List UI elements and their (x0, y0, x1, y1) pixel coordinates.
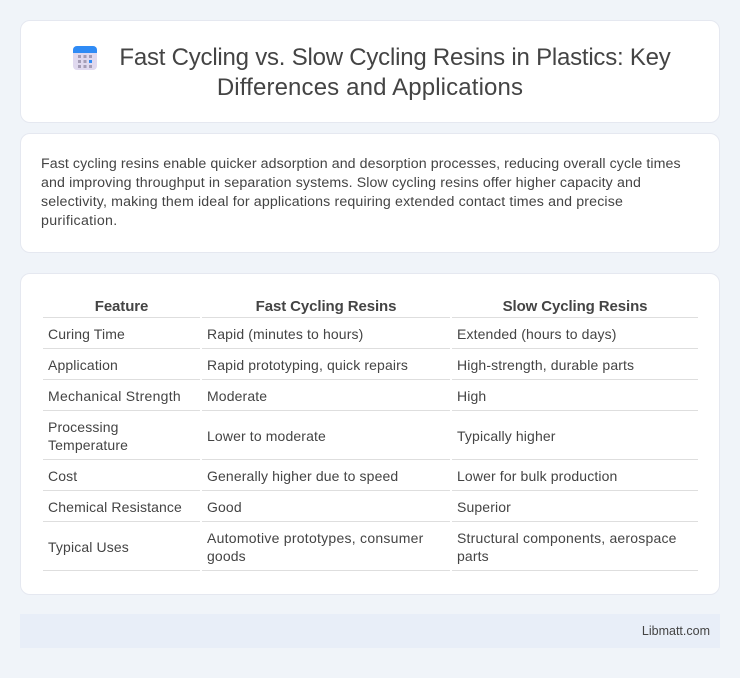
row: application: Rapid prototyping, quick repairs (207, 357, 408, 373)
row: curing time: Extended (hours to days) (457, 326, 617, 342)
table (43, 298, 698, 571)
row: chemical resistance: Good (207, 499, 242, 515)
title: Fast Cycling vs. Slow Cycling Resins in Plastics: Key (119, 44, 671, 71)
title (119, 44, 671, 101)
row: chemical resistance: Chemical Resistance (48, 499, 182, 515)
row: typical uses: goods (207, 548, 246, 564)
footer bar (20, 614, 720, 648)
row: cost: Cost (48, 468, 77, 484)
row: application: Application (48, 357, 118, 373)
comparison table panel (20, 273, 720, 595)
row: typical uses: Structural components, aerospace (457, 530, 677, 546)
header row: Slow Cycling Resins (503, 298, 647, 315)
row: processing temperature: Lower to moderate (207, 428, 326, 444)
row: curing time: Curing Time (48, 326, 125, 342)
row: application (48, 357, 634, 373)
row: curing time (48, 326, 617, 342)
intro text: Fast cycling resins enable quicker adsorption and desorption processes, reducing overall cycle times (41, 156, 681, 172)
row: processing temperature: Typically higher (457, 428, 556, 444)
intro text (41, 156, 681, 229)
row: chemical resistance (48, 499, 511, 515)
intro text: purification. (41, 213, 117, 229)
row: mechanical strength: High (457, 388, 486, 404)
header row (95, 298, 647, 315)
row: cost (48, 468, 617, 484)
header panel (20, 20, 720, 123)
row: cost: Generally higher due to speed (207, 468, 398, 484)
header row: Fast Cycling Resins (256, 298, 396, 315)
header row: Feature (95, 298, 148, 315)
intro text: selectivity, making them ideal for applications requiring extended contact times and precise (41, 194, 623, 210)
row: typical uses (48, 530, 677, 564)
row: mechanical strength (48, 388, 486, 404)
row: processing temperature: Temperature (48, 437, 128, 453)
row: typical uses: parts (457, 548, 489, 564)
row: mechanical strength: Moderate (207, 388, 267, 404)
intro text: and improving throughput in separation systems. Slow cycling resins offer higher capacity and (41, 175, 641, 191)
row: application: High-strength, durable parts (457, 357, 634, 373)
row: processing temperature (48, 419, 556, 453)
title: Differences and Applications (217, 74, 523, 101)
row: typical uses: Typical Uses (48, 539, 129, 555)
row: chemical resistance: Superior (457, 499, 511, 515)
intro panel (20, 133, 720, 253)
row: processing temperature: Processing (48, 419, 119, 435)
footer text: Libmatt.com (642, 624, 710, 638)
row: cost: Lower for bulk production (457, 468, 617, 484)
row: typical uses: Automotive prototypes, consumer (207, 530, 424, 546)
row: mechanical strength: Mechanical Strength (48, 388, 181, 404)
icon: calendar (73, 46, 97, 70)
row: curing time: Rapid (minutes to hours) (207, 326, 363, 342)
